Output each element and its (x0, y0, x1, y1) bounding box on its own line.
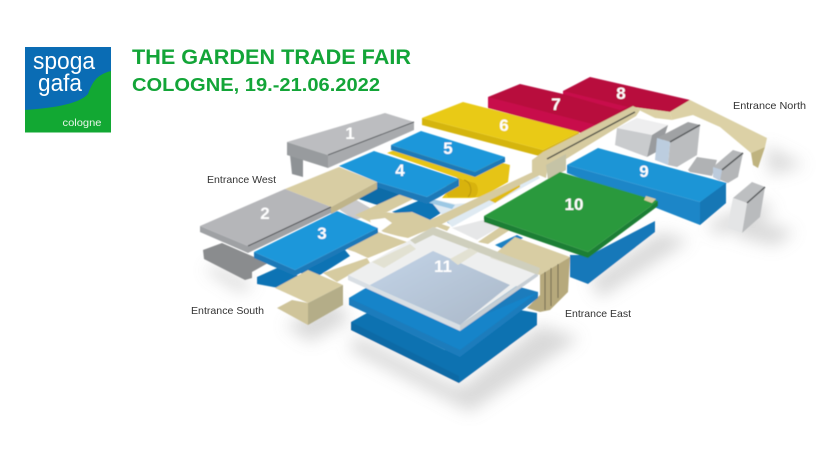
entrance east building (490, 237, 570, 312)
hall 6: 6 (499, 116, 509, 135)
title: THE GARDEN TRADE FAIR (132, 46, 411, 69)
hall 8 number: 8 (616, 84, 626, 103)
hall 8 divider band (563, 91, 628, 110)
walkways (323, 106, 640, 282)
label: entrance east: Entrance East (565, 308, 631, 320)
hall 10 lower level (570, 221, 655, 284)
hall 1 (287, 113, 414, 177)
hall 5: 5 (443, 139, 453, 158)
hall 2 lower level (203, 243, 268, 280)
subtitle: place and date: COLOGNE, 19.-21.06.2022 (132, 75, 380, 95)
label: entrance south: Entrance South (191, 305, 264, 317)
north walkway over halls (532, 106, 640, 180)
hall 5 (391, 131, 505, 177)
hall 10 (484, 172, 658, 258)
logo: spoga gafa cologne: cologne (62, 117, 102, 129)
hall 3: 3 (317, 224, 327, 243)
hall 3 (254, 211, 378, 276)
label: entrance west: Entrance West (207, 174, 276, 186)
hall 4: 4 (395, 161, 405, 180)
hall 9: 9 (639, 162, 649, 181)
hall 11 middle level (349, 285, 538, 357)
hall 3 lower level (257, 250, 350, 292)
hall 7 number: 7 (551, 95, 561, 114)
lower level blocks and yellow ramps (340, 140, 540, 249)
logo: spoga gafa cologne (25, 47, 111, 132)
logo: spoga gafa cologne: gafa (38, 70, 83, 97)
hall 4 (339, 151, 459, 204)
hall 9 (567, 148, 727, 225)
ground shadows (205, 145, 805, 412)
hall 2 (200, 189, 331, 253)
hall 1: 1 (345, 124, 355, 143)
hall 10: 10 (565, 195, 583, 214)
hall 6 (422, 102, 579, 157)
label: entrance north: Entrance North (733, 100, 806, 112)
hall 11 lower level (351, 310, 537, 383)
walkway holes (370, 218, 393, 236)
logo: spoga gafa cologne: spoga (33, 48, 96, 75)
hall 8 and hall 7 base (488, 77, 690, 134)
entrance south building (275, 270, 343, 325)
hall 11 glass roof: 11 (434, 257, 452, 276)
hall 11 glass roof (348, 227, 540, 331)
entrance north arch (633, 100, 767, 168)
service buildings (615, 118, 765, 233)
entrance west walkway (285, 167, 377, 214)
exhibition ground map (200, 77, 805, 412)
hall 7 front band (488, 97, 596, 134)
hall 2: 2 (260, 204, 270, 223)
